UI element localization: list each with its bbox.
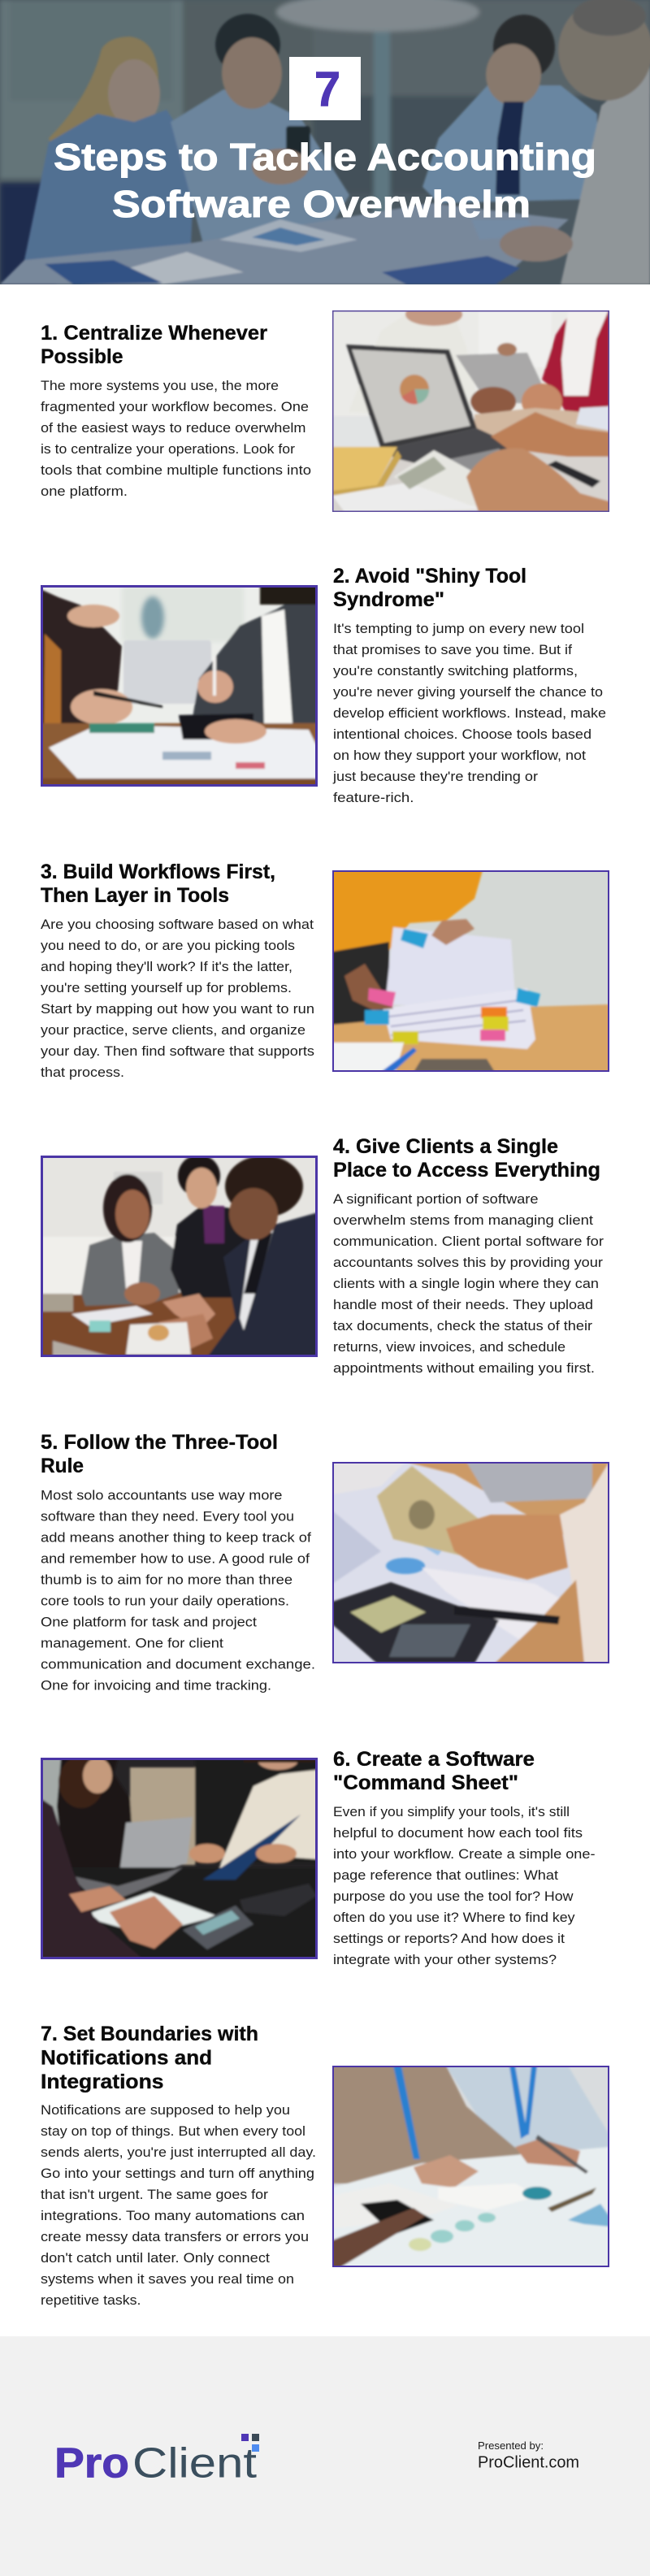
heading 4: 4. Give Clients a Single: [333, 1135, 558, 1158]
body text 7: Notifications are supposed to help you: [41, 2103, 290, 2118]
heading 4: Place to Access Everything: [333, 1159, 600, 1182]
body text 5: [41, 1489, 315, 1693]
body text 1: of the easiest ways to reduce overwhelm: [41, 421, 306, 436]
heading 3: Then Layer in Tools: [41, 884, 229, 907]
photo: hand holding cash over calculator: [332, 1462, 609, 1663]
body text 7: sends alerts, you're just interrupted all day.: [41, 2145, 316, 2160]
man 3: [561, 65, 650, 284]
heading 7: Notifications and: [41, 2046, 212, 2069]
body text 5: software than they need. Every tool you: [41, 1510, 294, 1524]
body text 1: [41, 379, 311, 499]
body text 2: intentional choices. Choose tools based: [333, 727, 592, 742]
body text 6: settings or reports? And how does it: [333, 1932, 565, 1946]
body text 1: tools that combine multiple functions into: [41, 463, 311, 478]
heading 4: [333, 1135, 600, 1182]
body text 4: appointments without emailing you first.: [333, 1361, 595, 1376]
body text 5: add means another thing to keep track of: [41, 1531, 311, 1546]
body text 4: overwhelm stems from managing client: [333, 1213, 593, 1228]
body text 5: thumb is to aim for no more than three: [41, 1573, 292, 1588]
body text 3: [41, 917, 314, 1080]
heading 6: "Command Sheet": [333, 1772, 518, 1794]
body text 3: your day. Then find software that supports: [41, 1044, 314, 1059]
heading 2: [333, 565, 526, 611]
body text 3: and hoping they'll work? If it's the latter,: [41, 960, 292, 974]
body text 6: purpose do you use the tool for? How: [333, 1889, 574, 1904]
heading 5: Rule: [41, 1455, 84, 1477]
body text 1: is to centralize your operations. Look for: [41, 442, 296, 457]
step 4: [41, 1135, 604, 1376]
photo: laptop with pie chart: [332, 303, 609, 512]
heading 6: 6. Create a Software: [333, 1748, 535, 1771]
body text 3: you need to do, or are you picking tools: [41, 939, 295, 953]
body text 3: you're setting yourself up for problems.: [41, 981, 292, 995]
heading 3: 3. Build Workflows First,: [41, 861, 275, 883]
body text 6: helpful to document how each tool fits: [333, 1826, 583, 1841]
presented by: [478, 2439, 579, 2472]
body text 2: you're never giving yourself the chance to: [333, 685, 603, 700]
body text 4: accountants solves this by providing your: [333, 1255, 604, 1270]
title: Software Overwhelm: [112, 183, 531, 225]
logo: ProClient: [54, 2434, 259, 2487]
body text 2: [332, 622, 606, 805]
title: [54, 136, 596, 225]
body text 7: don't catch until later. Only connect: [41, 2251, 270, 2266]
heading 1: Possible: [41, 345, 124, 368]
body text 5: core tools to run your daily operations.: [41, 1594, 289, 1609]
body text 7: Go into your settings and turn off anything: [41, 2166, 314, 2181]
heading 7: Integrations: [41, 2071, 164, 2093]
body text 6: into your workflow. Create a simple one-: [333, 1847, 595, 1862]
heading 2: 2. Avoid "Shiny Tool: [333, 565, 526, 588]
icon: logo squares: [241, 2434, 259, 2452]
heading 6: [333, 1748, 535, 1794]
header banner: [0, 0, 650, 284]
logo: ProClient: Pro: [54, 2439, 129, 2487]
presented by: Presented by:: [478, 2439, 544, 2452]
body text 7: repetitive tasks.: [41, 2293, 141, 2308]
body text 2: just because they're trending or: [332, 770, 539, 784]
body text 2: feature-rich.: [333, 791, 414, 805]
logo: ProClient: Client: [132, 2439, 258, 2487]
body text 1: fragmented your workflow becomes. One: [41, 400, 309, 414]
body text 3: Start by mapping out how you want to run: [41, 1002, 314, 1017]
heading 2: Syndrome": [333, 588, 444, 611]
body text 7: stay on top of things. But when every tool: [41, 2124, 306, 2139]
table and papers: [0, 203, 569, 284]
body text 3: that process.: [41, 1065, 124, 1080]
heading 5: 5. Follow the Three-Tool: [41, 1431, 278, 1454]
body text 2: on how they support your workflow, not: [333, 748, 586, 763]
step 5: [41, 1431, 609, 1693]
body text 1: The more systems you use, the more: [41, 379, 279, 393]
woman: [49, 37, 158, 163]
body text 5: communication and document exchange.: [41, 1658, 315, 1672]
man 1: [171, 89, 349, 244]
body text 4: A significant portion of software: [333, 1192, 538, 1207]
heading 1: [41, 322, 267, 368]
body text 6: integrate with your other systems?: [333, 1953, 557, 1967]
photo: two colleagues with tablet and papers: [41, 585, 318, 787]
body text 5: management. One for client: [41, 1637, 223, 1651]
body text 7: systems when it saves you real time on: [41, 2272, 294, 2287]
body text 1: one platform.: [41, 484, 128, 499]
presented by: ProClient.com: [478, 2454, 579, 2472]
step 2: [41, 565, 606, 805]
step 1: [41, 303, 609, 512]
body text 2: develop efficient workflows. Instead, make: [333, 706, 606, 721]
step 6: [41, 1748, 595, 1967]
body text 5: and remember how to use. A good rule of: [41, 1552, 310, 1567]
header photo: team at meeting table: [0, 0, 650, 284]
body text 5: One for invoicing and time tracking.: [41, 1679, 271, 1693]
photo: team with laptop and clipboard: [41, 1750, 318, 1959]
body text 4: clients with a single login where they can: [333, 1277, 599, 1291]
body text 2: It's tempting to jump on every new tool: [333, 622, 584, 636]
body text 7: [41, 2103, 316, 2308]
step 7: [41, 2023, 609, 2308]
heading 5: [41, 1431, 278, 1477]
body text 6: Even if you simplify your tools, it's still: [333, 1805, 570, 1819]
body text 2: that promises to save you time. But if: [333, 643, 572, 657]
body text 6: often do you use it? Where to find key: [333, 1910, 575, 1925]
body text 3: your practice, serve clients, and organize: [41, 1023, 306, 1038]
photo: documents with binder clips: [332, 870, 609, 1072]
body text 5: One platform for task and project: [41, 1615, 257, 1630]
body text 3: Are you choosing software based on what: [41, 917, 314, 932]
body text 4: [333, 1192, 604, 1376]
heading 1: 1. Centralize Whenever: [41, 322, 267, 345]
body text 4: handle most of their needs. They upload: [333, 1298, 593, 1312]
body text 7: that isn't urgent. The same goes for: [41, 2188, 269, 2202]
heading 3: [41, 861, 275, 907]
footer: [0, 2336, 650, 2576]
body text 7: integrations. Too many automations can: [41, 2209, 305, 2223]
body text 6: page reference that outlines: What: [333, 1868, 558, 1883]
man 2: [422, 85, 597, 203]
body text 5: Most solo accountants use way more: [41, 1489, 283, 1503]
number box: 7: [314, 62, 340, 116]
body text 6: [333, 1805, 595, 1967]
heading 7: [41, 2023, 258, 2093]
body text 7: create messy data transfers or errors you: [41, 2230, 309, 2244]
body text 4: returns, view invoices, and schedule: [333, 1340, 566, 1355]
body text 4: tax documents, check the status of their: [333, 1319, 593, 1334]
number box: [289, 57, 361, 120]
body text 2: you're constantly switching platforms,: [333, 664, 578, 679]
step 3: [41, 861, 609, 1080]
title: Steps to Tackle Accounting: [54, 136, 596, 178]
body text 4: communication. Client portal software for: [333, 1234, 604, 1249]
photo: three colleagues in discussion: [41, 1155, 318, 1357]
heading 7: 7. Set Boundaries with: [41, 2023, 258, 2045]
photo: colleagues reviewing charts with calculator: [332, 2066, 609, 2267]
